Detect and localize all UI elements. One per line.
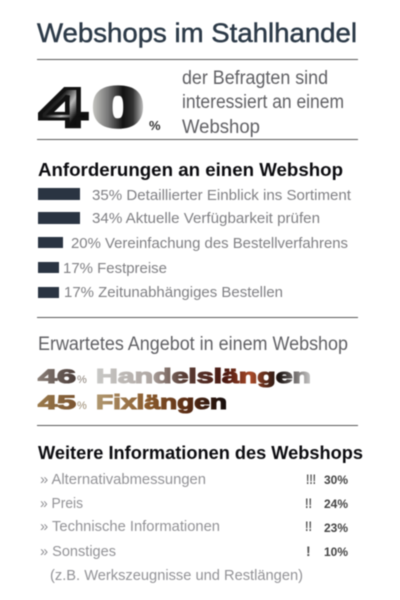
title: Webshops im Stahlhandel bbox=[37, 18, 357, 48]
bar: 17% Bestellen: 17% Zeitunabhängiges Bestellen bbox=[64, 285, 283, 301]
statistic: 45% Fixlängen: % bbox=[77, 400, 87, 412]
statistic: 45% Fixlängen: Fixlängen bbox=[96, 392, 227, 414]
row: Sonstiges: ! bbox=[306, 543, 311, 559]
row: Preis: » Preis bbox=[40, 496, 83, 512]
row: Technische Informationen bbox=[40, 518, 348, 535]
row: Preis: !! bbox=[305, 495, 312, 511]
row: Preis bbox=[40, 495, 348, 512]
bar: 35%: 35% Detaillierter Einblick ins Sortiment bbox=[92, 188, 351, 204]
statistic: 46% Handelslängen: 46 bbox=[38, 366, 76, 388]
heading: expected offer: Erwartetes Angebot in einem Webshop bbox=[38, 334, 348, 355]
statistic: 46% Handelslängen: % bbox=[77, 374, 87, 386]
heading: further information: Weitere Informationen des Webshops bbox=[38, 442, 363, 463]
statistic: 46% Handelslängen: Handelslängen bbox=[96, 366, 311, 388]
bar: 20%: 20% Vereinfachung des Bestellverfahrens bbox=[71, 236, 348, 252]
row: Technische Informationen: !! bbox=[305, 518, 312, 534]
statistic description: Webshop bbox=[182, 117, 260, 138]
heading: requirements: Anforderungen an einen Webshop bbox=[38, 159, 343, 180]
note: (z.B. Werkszeugnisse und Restlängen) bbox=[50, 568, 303, 584]
statistic: 45% Fixlängen bbox=[38, 392, 227, 414]
big statistic: 40 percent: % bbox=[149, 118, 161, 133]
row: Sonstiges: » Sonstiges bbox=[40, 544, 116, 560]
row: Alternativabmessungen: » Alternativabmessungen bbox=[40, 472, 206, 488]
row: Alternativabmessungen: !!! bbox=[306, 471, 316, 487]
row: Technische Informationen: 23% bbox=[324, 523, 348, 535]
row: Alternativabmessungen bbox=[40, 471, 348, 488]
list: further information bbox=[40, 471, 348, 584]
row: Sonstiges: 10% bbox=[324, 547, 348, 559]
bar: 34%: 34% Aktuelle Verfügbarkeit prüfen bbox=[92, 211, 320, 227]
bar: 17% Festpreise: 17% Festpreise bbox=[63, 261, 167, 277]
statistic description: der Befragten sind bbox=[182, 68, 328, 89]
statistic description: interessiert an einem bbox=[182, 92, 344, 113]
row: Alternativabmessungen: 30% bbox=[324, 475, 348, 487]
row: Sonstiges bbox=[40, 543, 348, 560]
statistic: 45% Fixlängen: 45 bbox=[38, 392, 76, 414]
statistic description bbox=[182, 68, 344, 138]
bar chart: requirements bbox=[38, 188, 351, 301]
big statistic: 40 percent: 4 bbox=[39, 76, 87, 139]
row: Technische Informationen: » Technische Informationen bbox=[40, 519, 220, 535]
big statistic: 40 percent: 0 bbox=[93, 76, 143, 138]
row: Preis: 24% bbox=[324, 499, 348, 511]
statistic: 46% Handelslängen bbox=[38, 366, 311, 388]
big statistic: 40 percent bbox=[39, 76, 161, 139]
